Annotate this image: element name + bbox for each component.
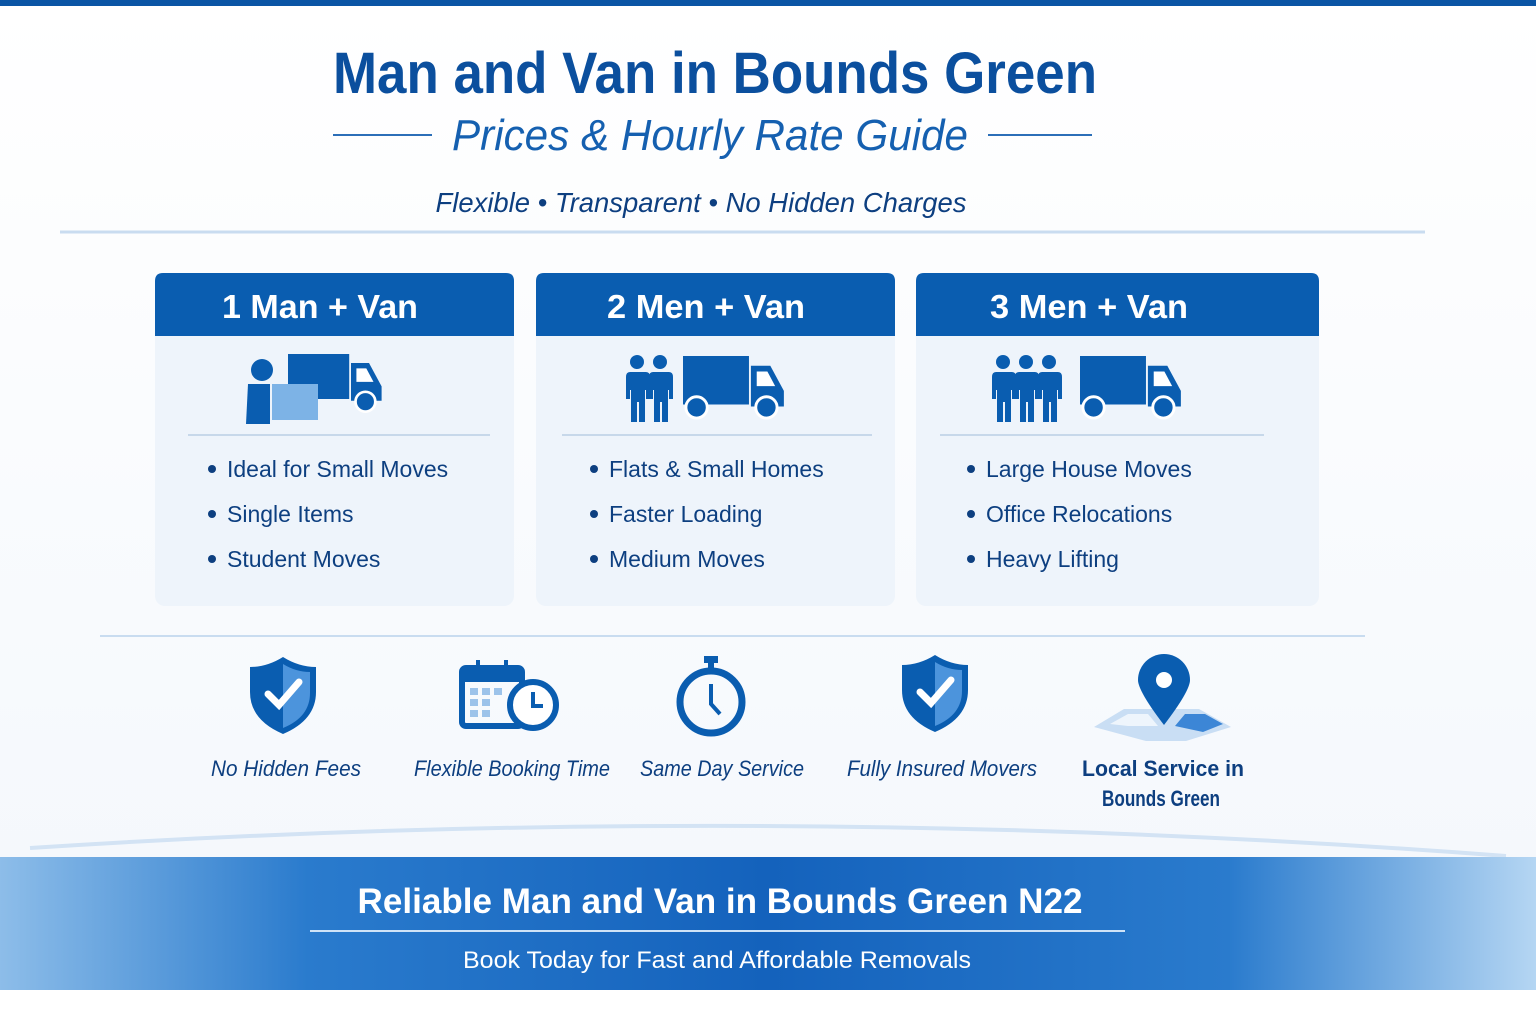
footer banner: Reliable Man and Van in Bounds Green N22 [358, 882, 1082, 921]
bullet list: Large House Moves [986, 456, 1192, 482]
feature: fully insured movers [847, 655, 1037, 781]
panel: 3 men + van [916, 273, 1319, 606]
icon: two men and van [626, 355, 784, 422]
bullet list: Single Items [227, 501, 354, 527]
panel: 1 man + van [155, 273, 514, 606]
panel: 2 men + van: 2 Men + Van [607, 288, 805, 325]
feature: same day service: Same Day Service [640, 756, 804, 781]
feature: fully insured movers: Fully Insured Movers [847, 756, 1037, 781]
feature: same day service [640, 656, 804, 781]
icon: man with box and van [246, 354, 382, 424]
icon: three men and van [992, 355, 1181, 422]
bullet list: Ideal for Small Moves [227, 456, 448, 482]
panel: 3 men + van: 3 Men + Van [990, 288, 1188, 325]
feature: flexible booking time: Flexible Booking Time [414, 756, 610, 781]
feature: local service: Bounds Green [1102, 786, 1220, 811]
panel: 1 man + van: 1 Man + Van [222, 288, 418, 325]
bullet list: Faster Loading [609, 501, 762, 527]
panel: 2 men + van [536, 273, 895, 606]
bullet list: Medium Moves [609, 546, 765, 572]
footer banner [0, 857, 1536, 990]
feature: no hidden fees [211, 657, 361, 781]
title: Man and Van in Bounds Green [333, 41, 1097, 106]
bullet list [967, 456, 1192, 572]
bullet list: Heavy Lifting [986, 546, 1119, 572]
feature: no hidden fees: No Hidden Fees [211, 756, 361, 781]
bullet list: Student Moves [227, 546, 380, 572]
bullet list: Office Relocations [986, 501, 1172, 527]
feature: flexible booking time [414, 660, 610, 781]
footer banner: Book Today for Fast and Affordable Removals [463, 947, 971, 974]
bullet list [590, 456, 824, 572]
bullet list: Flats & Small Homes [609, 456, 824, 482]
subtitle: Prices & Hourly Rate Guide [452, 111, 968, 160]
tagline: Flexible • Transparent • No Hidden Charges [436, 187, 966, 218]
feature: local service: Local Service in [1082, 756, 1244, 781]
bullet list [208, 456, 448, 572]
feature: local service [1082, 654, 1244, 811]
